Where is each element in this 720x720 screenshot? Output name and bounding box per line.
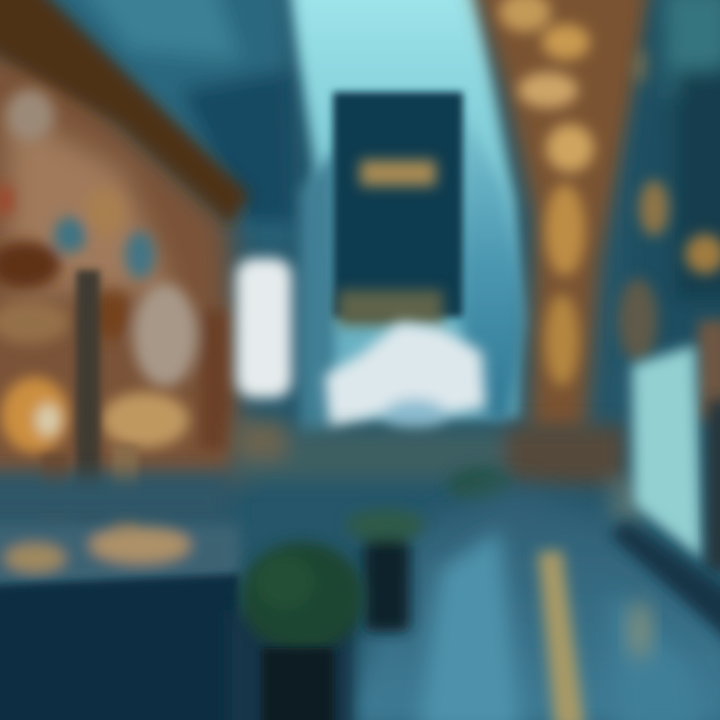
dark navy gap (228, 610, 353, 720)
right building (625, 0, 720, 360)
plant pot (262, 648, 334, 720)
white blurred window left (236, 258, 292, 398)
wet street floor (340, 485, 720, 720)
reflection right (628, 600, 652, 660)
wooden beam (0, 0, 250, 225)
small planter back (345, 509, 425, 632)
right warm panels (618, 180, 720, 420)
dark right kerb (610, 520, 720, 650)
sky (285, 0, 520, 420)
dark central tower (333, 92, 463, 317)
hedge (448, 467, 512, 503)
left warm interior (0, 40, 240, 480)
right light glass panel (632, 345, 702, 560)
glass tower side panels (300, 110, 530, 440)
golden column right (468, 0, 660, 435)
yellow reflection streak (538, 550, 585, 720)
glowing lamps left (1, 377, 189, 453)
lamp posts (42, 270, 138, 535)
mid street band (0, 420, 640, 530)
dark counter bottom left (0, 574, 240, 720)
golden column highlights (499, 0, 661, 386)
glass tower left (30, 0, 295, 240)
street reflections (420, 530, 700, 720)
white blurred canopy centre (325, 322, 486, 431)
plant foliage (240, 542, 364, 652)
left counter top (0, 525, 240, 585)
left interior details (0, 89, 230, 450)
tower lit windows (338, 160, 443, 326)
right dark edge (708, 400, 720, 570)
